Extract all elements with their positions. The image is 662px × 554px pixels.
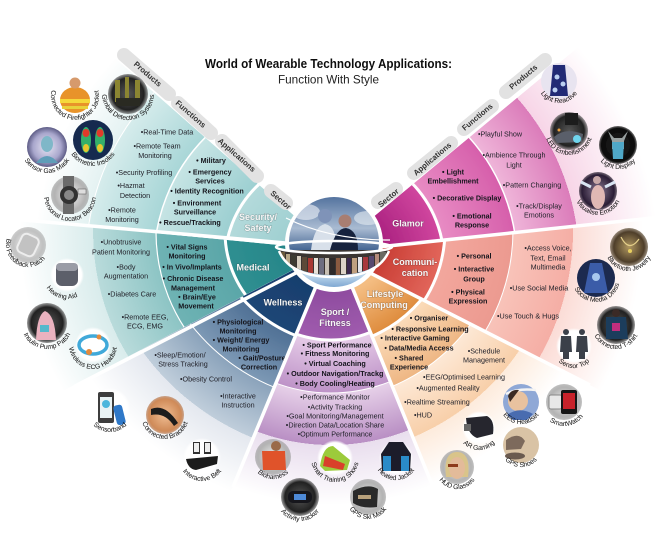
icon: gimbal detection systems: Gimbal Detection Systems xyxy=(102,94,154,120)
panel: wellness sector xyxy=(94,270,314,482)
applications list: medical: • Chronic Disease xyxy=(163,274,223,283)
icon: heated jacket: Heated Jacket xyxy=(378,468,414,480)
functions list: wellness: Instruction xyxy=(221,400,255,410)
functions list: sport xyxy=(286,392,384,438)
sector label: lifestyle computing: Computing xyxy=(360,300,408,310)
fan: wellness rings xyxy=(108,270,314,474)
icon: personal locator beacon: Personal Locator Beacon xyxy=(44,197,96,222)
functions list: communication: •Use Touch & Hugs xyxy=(497,312,559,320)
icon: biometric insoles xyxy=(72,120,114,166)
functions list: sport: •Optimum Performance xyxy=(298,430,372,438)
icon: smart training shoes xyxy=(312,440,358,482)
icon: wireless ecg headset xyxy=(69,328,117,369)
functions list: lifestyle: •Augmented Reality xyxy=(416,384,480,392)
functions list: medical: •Unobtrusive xyxy=(101,238,141,246)
applications list: wellness xyxy=(213,318,286,372)
applications list: security: • Emergency xyxy=(188,168,232,176)
icon: sensorband: Sensorband xyxy=(94,422,126,432)
applications list: glamor: Response xyxy=(455,220,489,230)
functions list: glamor: •Playful Show xyxy=(478,130,523,138)
icon: hearing aid: Hearing Aid xyxy=(46,285,78,300)
fan: medical rings xyxy=(36,223,293,383)
applications list: lifestyle: Experience xyxy=(390,362,428,372)
icon: smartwatch xyxy=(546,384,583,426)
applications list: medical: Management xyxy=(171,284,216,292)
functions list: glamor: •Track/Display xyxy=(516,202,562,210)
icon: light reactive xyxy=(541,63,577,104)
applications list: lifestyle: • Shared xyxy=(395,354,423,362)
tabs: security column headers xyxy=(124,55,293,211)
icon: led embellishment: LED Embellishment xyxy=(546,137,592,155)
tabs: glamor column headers xyxy=(376,60,545,209)
functions list: communication: •Access Voice, xyxy=(524,244,572,252)
applications list: medical: Movement xyxy=(178,302,214,310)
applications list: glamor: • Decorative Display xyxy=(433,194,501,202)
functions list: wellness: Stress Tracking xyxy=(158,360,208,368)
icon: sensor top xyxy=(556,329,590,368)
icon: light display xyxy=(599,126,637,170)
hub: globe with wearers and photo band xyxy=(275,194,395,292)
panel: security / safety sector xyxy=(25,48,294,242)
functions list: lifestyle: Management xyxy=(463,356,505,364)
icon: interactive belt: Interactive Belt xyxy=(183,468,222,482)
icon: connected firefighter jacket xyxy=(50,78,100,120)
sector label: wellness: Wellness xyxy=(264,298,302,308)
functions list: communication: Multimedia xyxy=(531,262,565,272)
functions list: communication: •Use Social Media xyxy=(510,284,568,292)
functions list: security: •Hazmat xyxy=(117,181,145,190)
fan: security rings xyxy=(52,69,294,242)
title xyxy=(205,57,452,86)
icon: connected bracelet: Connected Bracelet xyxy=(142,421,188,439)
sector label: communication: cation xyxy=(402,268,428,278)
title: World of Wearable Technology Applications: xyxy=(205,57,452,71)
sector label: security: Security/ xyxy=(239,212,278,222)
applications list: lifestyle: • Interactive Gaming xyxy=(380,334,450,342)
icon: hud glasses xyxy=(440,450,474,490)
tabs: glamor column headers: Functions xyxy=(460,101,495,133)
applications list: communication: • Interactive xyxy=(454,264,494,274)
icon: light reactive: Light Reactive xyxy=(541,90,577,104)
functions list: sport: •Activity Tracking xyxy=(308,402,362,412)
photo band around globe xyxy=(279,250,389,275)
functions list: security: Monitoring xyxy=(138,151,172,160)
icon: bioharness xyxy=(255,439,291,480)
applications list: medical xyxy=(162,242,223,310)
sector label: medical: Medical xyxy=(236,262,270,272)
icon: connected t-shirt xyxy=(595,306,638,349)
tabs: glamor column headers: Applications xyxy=(412,140,454,178)
applications list: communication: • Personal xyxy=(457,252,491,260)
functions list: security: Detection xyxy=(120,191,150,200)
icon: social media dress: Social Media Dress xyxy=(575,283,619,302)
applications list: security: • Identity Recognition xyxy=(170,186,244,196)
icon: gps shoes xyxy=(503,427,539,468)
icon: led embellishment xyxy=(546,112,592,155)
functions list: lifestyle xyxy=(404,346,505,420)
applications list: sport: • Outdoor Navigation/Trackg xyxy=(287,369,383,378)
icon: sensorband xyxy=(94,392,126,432)
sector label: security: Safety xyxy=(244,223,272,233)
icon: insulin pump patch: Insulin Pump Patch xyxy=(24,332,70,350)
functions list: glamor: •Ambience Through xyxy=(482,150,546,160)
applications list: lifestyle: • Responsive Learning xyxy=(391,324,469,334)
globe sphere xyxy=(289,197,379,287)
icon: light display: Light Display xyxy=(600,158,635,170)
applications list: glamor: • Light xyxy=(442,168,465,176)
sector label: sport / fitness: Fitness xyxy=(319,318,351,328)
functions list: wellness: •Interactive xyxy=(220,392,256,400)
applications list: medical: • In Vivo/Implants xyxy=(162,262,222,272)
icon: gps ski mask xyxy=(350,479,386,520)
applications list: sport: • Virtual Coaching xyxy=(304,359,366,368)
functions list: medical: •Body xyxy=(117,262,136,272)
functions list: medical xyxy=(92,238,168,330)
applications list: sport xyxy=(287,340,383,388)
applications list: wellness: • Gait/Posture xyxy=(238,354,286,362)
functions list: medical: •Diabetes Care xyxy=(108,290,156,298)
icon: interactive belt xyxy=(183,440,222,482)
applications list: security: Services xyxy=(195,176,225,186)
functions list: medical: Augmentation xyxy=(104,272,148,280)
panel: medical sector xyxy=(6,223,293,383)
functions list: lifestyle: •Schedule xyxy=(468,346,500,356)
icon: connected t-shirt: Connected T-shirt xyxy=(595,334,638,349)
applications list: wellness: • Weight/ Energy xyxy=(213,336,269,344)
tabs: security column headers: Sector xyxy=(269,189,293,211)
functions list: wellness xyxy=(154,350,256,410)
functions list: security: •Remote Team xyxy=(133,142,181,150)
applications list: wellness: Monitoring xyxy=(219,326,257,336)
functions list: lifestyle: •HUD xyxy=(414,410,432,420)
sector label: glamor: Glamor xyxy=(392,218,424,228)
functions list: sport: •Performance Monitor xyxy=(300,392,370,402)
sector label: sport / fitness xyxy=(319,307,351,328)
applications list: medical: • Vital Signs xyxy=(166,242,208,252)
functions list: lifestyle: •EEG/Optimised Learning xyxy=(423,372,505,382)
sector label: sport / fitness: Sport / xyxy=(321,307,350,317)
applications list: security: Surveillance xyxy=(174,208,216,216)
icon: sensor gas mask: Sensor Gas Mask xyxy=(25,158,70,173)
applications list: security: • Rescue/Tracking xyxy=(159,218,221,227)
icon: biometric insoles: Biometric Insoles xyxy=(72,152,114,166)
applications list: sport: • Fitness Monitoring xyxy=(301,349,369,358)
icon: wireless ecg headset: Wireless ECG Headset xyxy=(69,346,117,369)
icon: visualise emotion xyxy=(577,172,620,215)
panel: communication sector xyxy=(373,222,651,382)
panel: lifestyle computing sector xyxy=(351,275,583,490)
functions list: communication xyxy=(497,244,572,320)
functions list: lifestyle: •Realtime Streaming xyxy=(404,398,470,406)
functions list: glamor: •Pattern Changing xyxy=(503,180,561,190)
icon: hud glasses: HUD Glasses xyxy=(440,477,474,490)
functions list: security: •Real-Time Data xyxy=(141,128,193,136)
applications list: communication xyxy=(449,252,494,306)
icon: bluetooth jewelry: Bluetooth Jewelry xyxy=(608,256,651,271)
sector label: lifestyle computing: Lifestyle xyxy=(367,289,403,299)
applications list: lifestyle: • Organiser xyxy=(410,314,448,322)
icon: eeg headset: EEG Headset xyxy=(503,412,539,424)
applications list: lifestyle xyxy=(380,314,469,372)
functions list: security xyxy=(105,128,193,224)
applications list: communication: Expression xyxy=(449,296,487,306)
icon: bioharness: Bioharness xyxy=(258,470,288,480)
functions list: security: •Remote xyxy=(108,206,136,214)
fan: communication rings xyxy=(373,222,629,382)
applications list: communication: Group xyxy=(463,274,485,284)
fan: glamor rings xyxy=(374,58,640,244)
icon: sensor gas mask xyxy=(25,127,70,173)
icon: gps ski mask: GPS Ski Mask xyxy=(350,507,386,520)
applications list: sport: • Body Cooling/Heating xyxy=(295,379,375,388)
tabs: glamor column headers: Sector xyxy=(376,187,401,209)
fan: sport rings xyxy=(241,288,424,490)
icon: smart training shoes: Smart Training Shoes xyxy=(312,462,358,482)
functions list: medical: Patient Monitoring xyxy=(92,248,150,256)
functions list: medical: ECG, EMG xyxy=(127,322,163,330)
icon: bluetooth jewelry xyxy=(608,228,651,271)
subtitle: Function With Style xyxy=(278,72,379,86)
applications list: security xyxy=(159,156,244,227)
icon: activity tracker: Activity tracker xyxy=(280,509,318,522)
functions list: wellness: •Sleep/Emotion/ xyxy=(154,350,206,360)
applications list: security: • Military xyxy=(196,156,226,165)
sector label: communication xyxy=(393,257,437,278)
applications list: sport: • Sport Performance xyxy=(302,340,372,350)
functions list: glamor: Light xyxy=(506,160,522,170)
functions list: glamor xyxy=(478,130,562,220)
icon: visualise emotion: Visualise Emotion xyxy=(577,199,620,215)
icon: ar gaming: AR Gaming xyxy=(463,440,495,450)
applications list: communication: • Physical xyxy=(451,288,485,296)
functions list: security: •Security Profiling xyxy=(116,168,172,177)
functions list: sport: •Goal Monitoring/Management xyxy=(286,412,384,420)
icon: activity tracker xyxy=(280,478,319,522)
applications list: wellness: Monitoring xyxy=(222,344,260,354)
panel: glamor sector xyxy=(371,53,640,244)
icon: smartwatch: SmartWatch xyxy=(550,414,583,426)
sector label: communication: Communi- xyxy=(393,257,437,267)
functions list: security: Monitoring xyxy=(105,215,139,224)
functions list: medical: •Remote EEG, xyxy=(122,312,168,322)
icon: social media dress xyxy=(575,259,619,302)
icon: sensor top: Sensor Top xyxy=(559,358,589,368)
functions list: sport: •Direction Data/Location Share xyxy=(286,420,384,430)
applications list: glamor: • Emotional xyxy=(452,212,492,220)
tabs: security column headers: Products xyxy=(132,60,164,89)
icon: insulin pump patch xyxy=(24,303,70,350)
sector label: lifestyle computing xyxy=(360,289,408,310)
functions list: communication: Text, Email xyxy=(530,254,566,262)
applications list: wellness: • Physiological xyxy=(213,318,263,326)
tabs: security column headers: Applications xyxy=(216,136,258,174)
icon: gps shoes: GPS Shoes xyxy=(506,458,536,468)
tabs: glamor column headers: Products xyxy=(508,62,540,91)
functions list: glamor: Emotions xyxy=(524,210,554,220)
applications list: wellness: Correction xyxy=(241,362,277,372)
icon: bio feedback patch: Bio Feedback Patch xyxy=(6,238,45,268)
icon: heated jacket xyxy=(378,442,414,480)
sector label: security xyxy=(239,212,278,233)
applications list: glamor xyxy=(427,168,501,230)
icon: eeg headset xyxy=(503,384,539,424)
applications list: glamor: Embellishment xyxy=(427,176,479,186)
tabs: security column headers: Functions xyxy=(174,98,208,130)
icon: connected bracelet xyxy=(142,396,188,439)
applications list: medical: Monitoring xyxy=(168,252,206,260)
icon: bio feedback patch xyxy=(6,227,46,268)
icon: ar gaming xyxy=(463,412,495,450)
functions list: wellness: •Obesity Control xyxy=(180,374,232,384)
panel: sport / fitness sector xyxy=(241,288,424,522)
icon: hearing aid xyxy=(46,259,84,300)
applications list: medical: • Brain/Eye xyxy=(178,292,216,302)
icon: gimbal detection systems xyxy=(102,74,154,120)
fan: lifestyle rings xyxy=(351,275,553,472)
icon: connected firefighter jacket: Connected Firefighter Jacket xyxy=(50,90,100,120)
applications list: lifestyle: • Data/Media Access xyxy=(384,344,454,352)
icon: personal locator beacon xyxy=(44,176,96,222)
applications list: security: • Environment xyxy=(173,198,222,208)
